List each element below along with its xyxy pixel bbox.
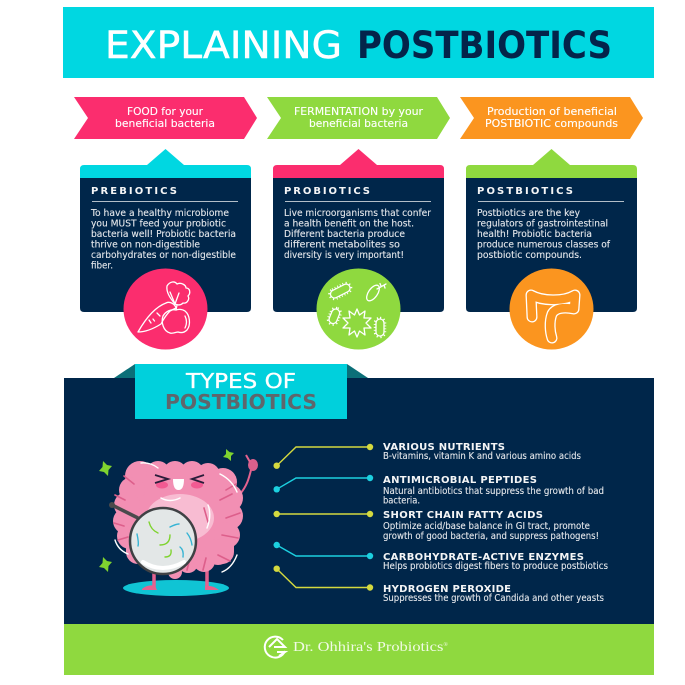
text: postbiotics description: [477, 208, 611, 261]
heading tab: POSTBIOTICS: [165, 390, 317, 414]
text: prebiotics description: bacteria well! Probiotic bacteria: [91, 229, 236, 240]
panel: types of postbiotics: [64, 364, 654, 624]
text: prebiotics description: carbohydrates or non-digestible: [91, 250, 236, 261]
arrow: fermentation: FERMENTATION by your: [294, 106, 424, 118]
magnifier: [109, 502, 196, 574]
text: postbiotics description: produce numerous classes of: [477, 240, 611, 250]
text: probiotics description: Different bacteria produce: [284, 229, 405, 240]
arrow: fermentation: [267, 97, 450, 139]
text: prebiotics description: [90, 208, 236, 272]
heading: prebiotics: PREBIOTICS: [91, 186, 177, 197]
arrow: production: Production of beneficial: [487, 106, 617, 118]
title banner: POSTBIOTICS: [357, 24, 612, 67]
heading tab: TYPES OF: [185, 369, 296, 393]
icon: bacteria: [316, 268, 400, 350]
connector lines: [274, 444, 373, 591]
list item: various nutrients: VARIOUS NUTRIENTS: [383, 442, 505, 453]
brand name: Dr. Ohhira's Probiotics: [293, 639, 417, 654]
list item: carbohydrate-active enzymes: Helps probiotics digest fibers to produce postbiotics: [383, 561, 608, 572]
list item: antimicrobial peptides: ANTIMICROBIAL PEPTIDES: [383, 475, 537, 486]
icon: colon: [510, 268, 594, 350]
list item: various nutrients: B-vitamins, vitamin K and various amino acids: [383, 451, 581, 462]
text: prebiotics description: To have a healthy microbiome: [90, 208, 229, 219]
character face: [155, 475, 204, 490]
list item: hydrogen peroxide: HYDROGEN PEROXIDE: [383, 584, 511, 595]
text: postbiotics description: postbiotic compounds.: [477, 250, 582, 261]
list item: antimicrobial peptides: Natural antibiotics that suppress the growth of bad: [383, 486, 604, 497]
panel: probiotics: [273, 149, 444, 350]
panel: postbiotics: [466, 149, 637, 350]
text: prebiotics description: thrive on non-digestible: [91, 240, 200, 250]
heading: probiotics: PROBIOTICS: [284, 186, 370, 197]
list item: short chain fatty acids: [383, 510, 599, 542]
title banner: [63, 7, 654, 78]
list item: short chain fatty acids: Optimize acid/base balance in GI tract, promote: [383, 521, 590, 532]
arrow: food: [74, 97, 257, 139]
list item: carbohydrate-active enzymes: [383, 552, 608, 572]
text: probiotics description: different metabolites so: [284, 240, 400, 250]
text: probiotics description: diversity is very important!: [284, 250, 404, 261]
icon: carrot and apple: [124, 268, 208, 350]
text: prebiotics description: fiber.: [91, 260, 113, 272]
list item: short chain fatty acids: SHORT CHAIN FATTY ACIDS: [383, 510, 543, 521]
heading: postbiotics: POSTBIOTICS: [477, 186, 573, 197]
list item: various nutrients: [383, 442, 581, 462]
text: probiotics description: a health benefit on the host.: [284, 219, 414, 230]
panel: prebiotics: [80, 149, 251, 350]
list item: hydrogen peroxide: [383, 584, 604, 604]
footer band: [64, 624, 654, 675]
list item: hydrogen peroxide: Suppresses the growth of Candida and other yeasts: [383, 593, 604, 604]
illustration: colon character with magnifier: [109, 455, 258, 596]
list item: short chain fatty acids: growth of good bacteria, and suppress pathogens!: [383, 531, 599, 542]
list item: antimicrobial peptides: [383, 475, 604, 506]
arrow: food: beneficial bacteria: [115, 118, 215, 130]
arrow: production: [460, 97, 643, 139]
title banner: EXPLAINING: [105, 24, 342, 67]
list item: carbohydrate-active enzymes: CARBOHYDRATE-ACTIVE ENZYMES: [383, 552, 584, 563]
heading tab: [135, 364, 347, 419]
text: prebiotics description: you MUST feed your probiotic: [91, 219, 226, 230]
arrow: fermentation: beneficial bacteria: [309, 118, 408, 130]
brand name: ®: [443, 642, 448, 648]
text: postbiotics description: health! Probiotic bacteria: [477, 229, 592, 240]
text: probiotics description: Live microorganisms that confer: [284, 208, 431, 219]
sparkle icons: [99, 449, 234, 572]
text: probiotics description: [284, 208, 431, 261]
arrow: production: POSTBIOTIC compounds: [485, 118, 618, 130]
icon: brand logo: [265, 637, 285, 658]
text: postbiotics description: Postbiotics are the key: [477, 208, 580, 219]
text: postbiotics description: regulators of gastrointestinal: [477, 219, 608, 230]
list item: antimicrobial peptides: bacteria.: [383, 496, 420, 506]
arrow: food: FOOD for your: [127, 106, 204, 118]
